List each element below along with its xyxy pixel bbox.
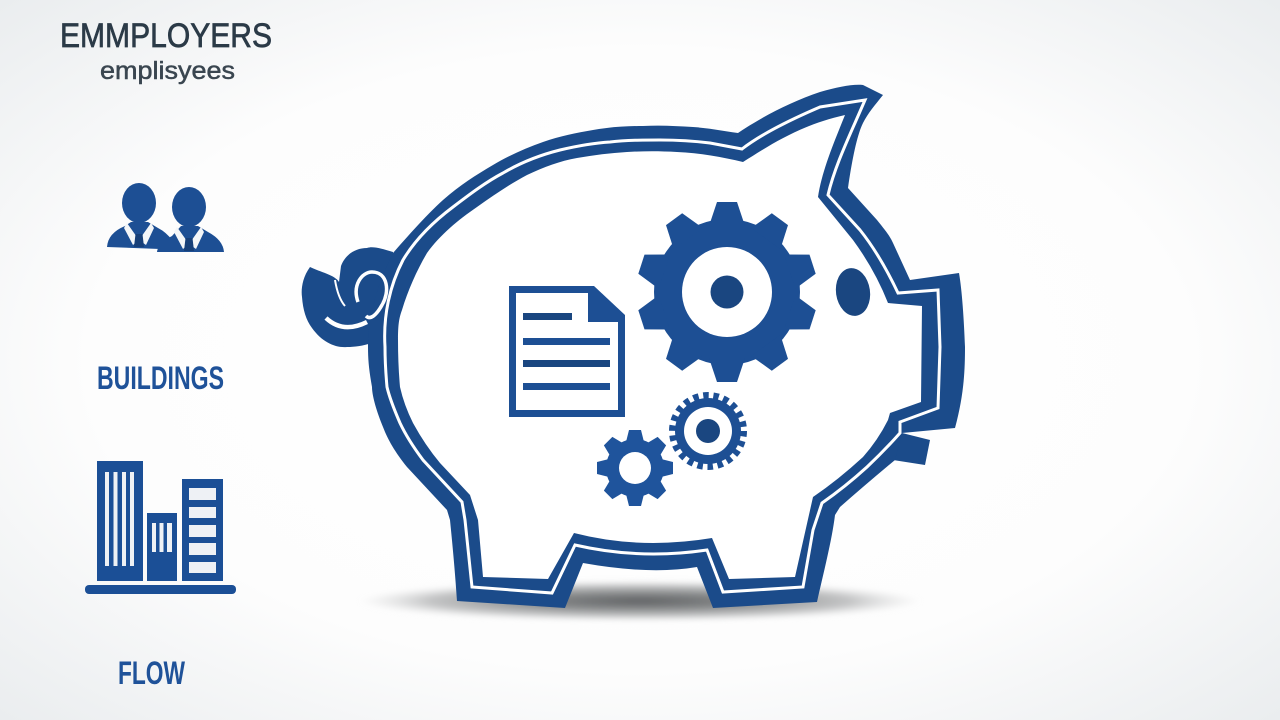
pig white line: [385, 100, 940, 593]
title: EMMPLOYERS: EMMPLOYERS: [60, 17, 272, 55]
icon: large gear: [636, 202, 818, 382]
icon: small gear with ring: [672, 396, 744, 466]
icon: two people: [107, 183, 224, 252]
tail white details: [326, 272, 387, 327]
pig eye: [833, 266, 873, 318]
piggy bank: [302, 85, 965, 608]
subtitle: emplisyees: emplisyees: [100, 57, 235, 85]
icon: buildings: [85, 461, 236, 594]
pig body outline: [368, 85, 965, 608]
icon: document: [509, 286, 625, 417]
icon: small gear: [597, 430, 673, 506]
pig tail: [302, 247, 393, 347]
pig mouth notch: [893, 432, 930, 465]
pig inner fill: [398, 115, 922, 579]
ground shadow: [358, 581, 922, 621]
label: FLOW: FLOW: [118, 655, 186, 691]
label: BUILDINGS: BUILDINGS: [97, 360, 224, 396]
